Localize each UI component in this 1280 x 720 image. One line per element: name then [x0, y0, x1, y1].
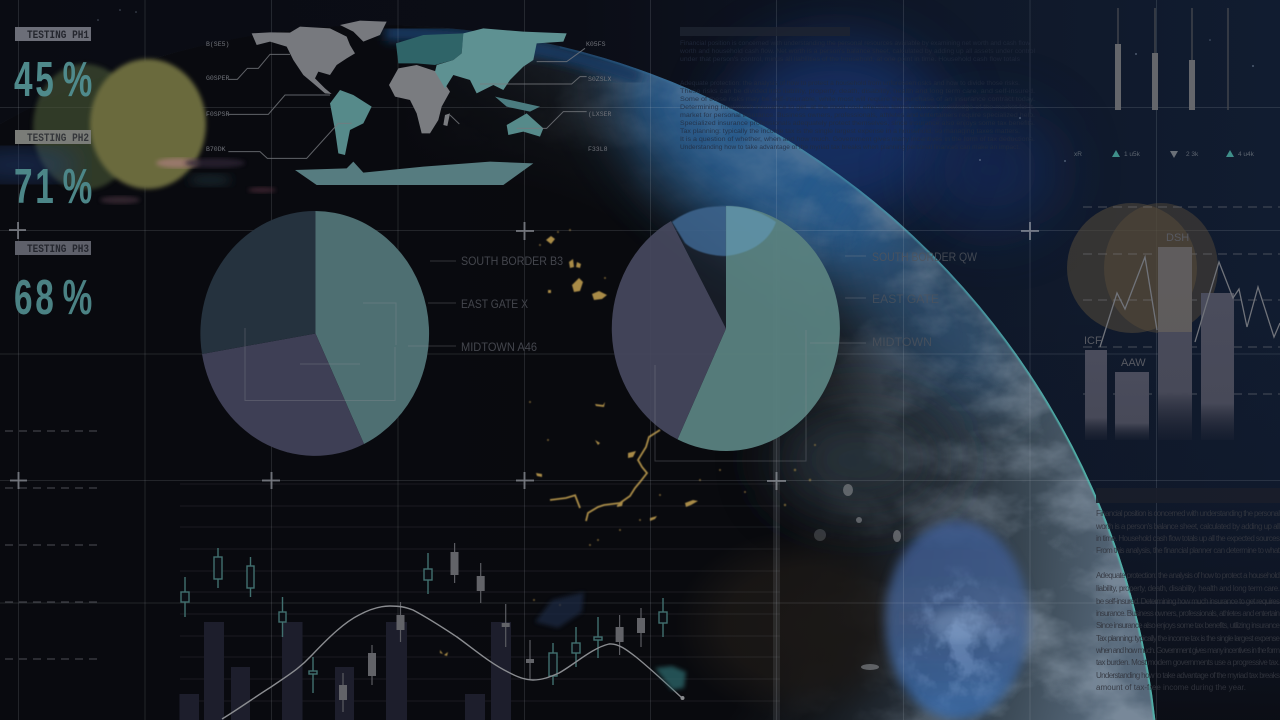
text block: right: Adequate protection: the analysis of how to protect a household — [1096, 571, 1280, 580]
text block: right: be self-insured. Determining how much insurance to get requires — [1096, 597, 1280, 606]
text block: right: in time. Household cash flow totals up all the expected sources — [1096, 534, 1280, 543]
legend: top right — [1074, 150, 1255, 158]
text block: right: worth is a person's balance sheet, calculated by adding up all — [1095, 522, 1280, 531]
bar labels — [1084, 232, 1189, 369]
map labels: S0ZSLX — [588, 76, 612, 83]
pie labels — [461, 250, 978, 354]
top limb glow — [385, 33, 640, 78]
stat: testing PH3: 68% — [14, 270, 95, 325]
text block: right: liability, property, death, disability, health and long term care. — [1096, 584, 1280, 593]
bar labels: ICF — [1084, 335, 1102, 347]
legend: top right: 4 u4k — [1238, 151, 1255, 158]
candles: top right — [1115, 8, 1228, 110]
text block: top: Financial position is concerned with understanding the personal resources available by examining net worth and cash flow — [680, 40, 1030, 47]
map labels — [206, 41, 612, 153]
continent: Europe — [396, 33, 463, 65]
pie leader lines — [245, 256, 866, 461]
text block: top: under that person's control, minus all liabilities of the household, at one point in time. Household cash flow totals — [680, 56, 1021, 63]
slice: purple — [202, 334, 364, 456]
stat: testing PH1: TESTING PH1 — [27, 30, 89, 42]
text block: right: Understanding how to take advantage of the myriad tax breaks — [1096, 671, 1280, 680]
panel: testing stats — [14, 27, 95, 325]
slice: purple — [612, 221, 726, 439]
stat: testing PH2: TESTING PH2 — [27, 133, 89, 145]
map labels: F0SPSR — [206, 111, 230, 118]
vertical scale bar — [773, 240, 780, 720]
pie labels: MIDTOWN — [872, 335, 932, 349]
bar labels: AAW — [1121, 357, 1146, 369]
pie labels: SOUTH BORDER QW — [872, 250, 978, 264]
legend: top right: 1 u5k — [1124, 151, 1141, 158]
stat: testing PH2 — [14, 130, 95, 214]
text block: right: when and how much. Government gives many incentives in the form — [1095, 646, 1280, 655]
bar chart: right — [1067, 203, 1280, 440]
pie chart: left — [200, 211, 429, 456]
pie chart: right — [612, 206, 840, 451]
blurred ocean marks — [535, 592, 584, 628]
text block: top: It is a question of whether, when and how much. Government gives many incentives in the form of tax deductions. — [680, 136, 1035, 143]
pie labels: EAST GATE — [872, 292, 939, 306]
text block: top: Specialized insurance professionals adequately protect themselves, since insurance also enjoys some tax benefits. — [680, 120, 1035, 127]
legend: top right: xR — [1074, 151, 1082, 158]
map labels: F33L8 — [588, 146, 608, 153]
text block: right: From this analysis, the financial planner can determine to what — [1096, 546, 1280, 555]
small islands — [814, 484, 901, 670]
text block: top: Tax planning: typically the income tax is the single largest expense in a household, so managing taxes matters. — [680, 128, 1020, 135]
flare circles — [1067, 203, 1218, 333]
continent: Asia — [435, 28, 567, 93]
gray candles — [343, 543, 641, 712]
text block: right: Tax planning: typically the income tax is the single largest expense — [1096, 634, 1280, 643]
left dashes — [5, 431, 98, 659]
text block: top: Determining how much insurance to get, at the most cost effective terms requires knowledge of the market for it. — [680, 104, 1035, 111]
pie labels: EAST GATE X — [461, 297, 528, 311]
trend curve — [222, 606, 682, 719]
dashed guides — [1083, 207, 1280, 394]
text block: right: Since insurance also enjoys some tax benefits, utilizing insurance — [1096, 621, 1280, 630]
volume bars — [180, 622, 511, 720]
bars — [1085, 247, 1234, 440]
city lights — [440, 229, 816, 656]
bar labels: DSH — [1166, 232, 1189, 244]
blue highlight over clouds — [885, 521, 1030, 720]
map labels: B(SE5) — [206, 41, 229, 48]
text block: top: worth and household cash flow. Net worth is a person's balance sheet, calculated by adding up all assets under control — [679, 48, 1036, 55]
world map — [228, 21, 587, 185]
candlestick chart panel — [180, 484, 780, 720]
blue highlight — [672, 206, 726, 256]
continent: Australia — [507, 113, 543, 137]
map callout lines — [228, 48, 587, 158]
text block: top — [679, 27, 1036, 151]
stat: testing PH3 — [14, 241, 95, 325]
text block: right: amount of tax-free income during the year. — [1096, 683, 1246, 692]
text block: right — [1095, 488, 1280, 692]
teal candles — [181, 548, 667, 693]
continent: South America — [330, 90, 372, 155]
stat: testing PH1: 45% — [14, 52, 95, 107]
legend: top right: 2 3k — [1186, 151, 1199, 158]
chart rules — [180, 484, 780, 701]
map labels: G0SPER — [206, 75, 230, 82]
text block: top: Some of these risks may be self-insurable, while most will require the purchase of an insurance contract today. — [680, 96, 1035, 103]
line series — [1100, 257, 1280, 347]
panel: lens flares — [0, 59, 276, 204]
map labels: K05FS — [586, 41, 606, 48]
continent: Africa — [389, 65, 450, 133]
continent: Madagascar — [443, 113, 450, 126]
text block: right: tax burden. Most modern governments use a progressive tax. — [1096, 658, 1280, 667]
continent: Greenland — [340, 21, 387, 42]
slice: dark — [671, 206, 726, 328]
text block: top: market for personal insurance. Business owners, professionals, athletes and entertainers require specialized help. — [680, 112, 1035, 119]
text block: right: insurance. Business owners, professionals, athletes and entertain — [1096, 609, 1280, 618]
slice: dark — [200, 211, 316, 354]
pie labels: SOUTH BORDER B3 — [461, 254, 563, 268]
crosshair markers — [9, 222, 1039, 490]
pie labels: MIDTOWN A46 — [461, 340, 537, 354]
continent: North America — [252, 27, 355, 94]
stat: testing PH1 — [14, 27, 95, 107]
stars — [97, 9, 1254, 162]
slice: teal — [678, 206, 840, 451]
continent: Indonesia — [495, 97, 540, 112]
map labels: (LXSER — [588, 111, 612, 118]
slice: teal — [316, 211, 429, 444]
text block: top: Understanding how to take advantage of the myriad tax breaks when planning personal finances can make an impact. — [680, 144, 1020, 151]
continent: Antarctica — [295, 162, 533, 185]
map labels: B70DK — [206, 146, 226, 153]
text block: top: These risks can be divided into liability, property, death, disability, health and long term care, and self-insured. — [680, 88, 1035, 95]
text block: top: Adequate protection: the analysis of how to protect a household from unforeseen risks and how to divide those risks. — [680, 80, 1020, 87]
stat: testing PH2: 71% — [14, 159, 95, 214]
text block: right: Financial position is concerned with understanding the personal — [1096, 509, 1280, 518]
stat: testing PH3: TESTING PH3 — [27, 244, 89, 256]
